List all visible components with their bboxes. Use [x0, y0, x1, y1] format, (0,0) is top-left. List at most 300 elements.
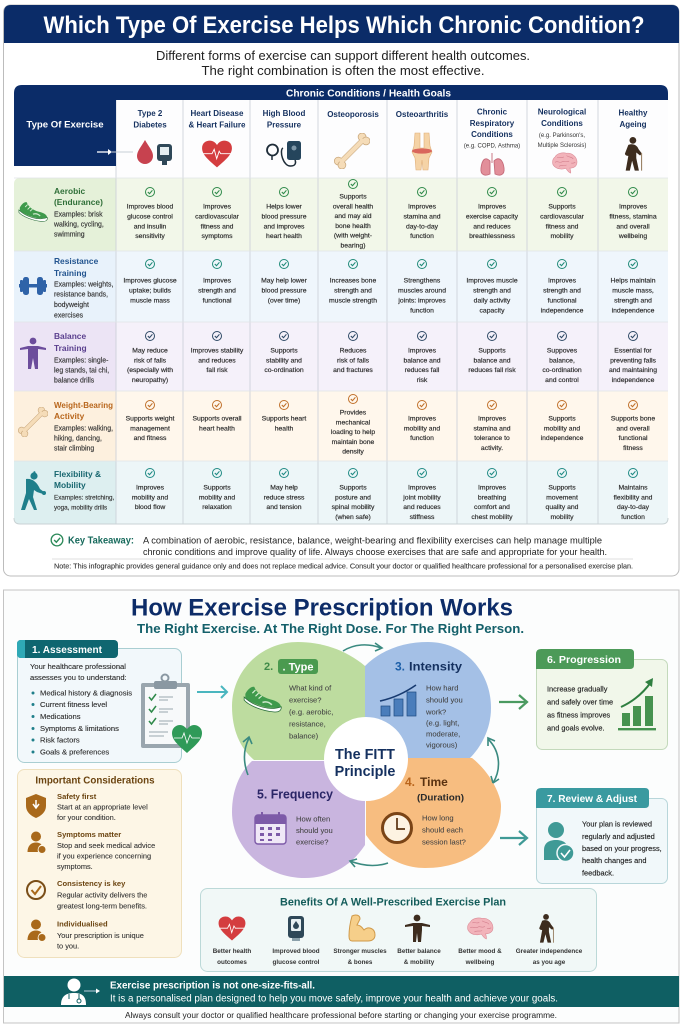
cell: aerobic, blood pressure: Helps lower — [266, 204, 302, 210]
quadrant: time: session last? — [422, 838, 466, 846]
cell: balance, osteoarthritis — [403, 332, 441, 384]
cell: aerobic, blood pressure — [262, 188, 307, 240]
cell: flexibility, osteoporosis: Supports — [339, 484, 367, 492]
cell: balance, osteoarthritis: Improves — [408, 348, 437, 354]
column: osteoporosis: Osteoporosis — [327, 110, 379, 119]
tag: assessment — [17, 640, 118, 658]
item: individualised — [28, 920, 144, 950]
benefit: muscles — [333, 915, 387, 966]
cell: balance, neurological: balance, — [549, 357, 575, 364]
quadrant: intensity: 3. — [395, 660, 405, 674]
cell: resistance, neurological — [541, 260, 584, 314]
cell: resistance, osteoarthritis: joints: improves — [397, 298, 446, 304]
cell: aerobic, respiratory: breathlessness — [469, 233, 515, 240]
quadrant: type: resistance, — [289, 720, 326, 728]
quadrant: type — [232, 642, 365, 760]
item: symptoms matter: Symptoms matter — [57, 830, 121, 839]
list: assessment items: Risk factors — [40, 736, 80, 744]
cell: balance, ageing: Essential for — [614, 348, 652, 354]
tag: progression: 6. Progression — [547, 654, 621, 666]
cell: balance, ageing — [609, 332, 657, 384]
benefit: balance: & mobility — [404, 959, 435, 966]
title: How Exercise Prescription Works — [131, 594, 513, 622]
cell: weight-bearing, heart: heart health — [199, 425, 235, 432]
cell: aerobic, osteoporosis: overall health — [333, 203, 373, 210]
cell: flexibility, osteoporosis: spinal mobility — [332, 504, 375, 511]
key takeaway: chronic conditions and improve quality of life. Always choose exercises that are safe and appropriate for your health. — [143, 547, 607, 557]
cell: flexibility, blood pressure — [264, 468, 305, 511]
cell: balance, osteoarthritis: risk — [417, 377, 428, 384]
column: healthy ageing: Healthy — [619, 108, 648, 118]
benefit: blood glucose: Improved blood — [272, 948, 320, 955]
cell: resistance, neurological: functional — [547, 298, 577, 304]
row label: aerobic: Examples: brisk — [54, 212, 103, 218]
cell: resistance, blood pressure: (over time) — [268, 298, 300, 304]
cell: aerobic, heart: symptoms — [202, 233, 233, 240]
cell: aerobic, heart: Improves — [203, 204, 232, 210]
cell: aerobic, heart — [195, 188, 240, 240]
cell: balance, blood pressure: co-ordination — [264, 367, 304, 374]
row label: aerobic: Aerobic — [54, 186, 86, 196]
row label: flexibility: Mobility — [54, 480, 86, 490]
row label: aerobic: swimming — [54, 232, 85, 238]
cell: aerobic, osteoporosis: bearing) — [341, 242, 365, 250]
row label: weight-bearing: stair climbing — [54, 446, 94, 452]
cell: flexibility, ageing: Maintains — [618, 484, 648, 492]
cell: aerobic, neurological — [540, 188, 585, 240]
text: intro: assesses you to understand: — [30, 673, 127, 682]
row label: aerobic: (Endurance) — [54, 197, 103, 207]
cell: flexibility, osteoporosis — [332, 468, 375, 521]
cell: weight-bearing, respiratory: activity. — [481, 445, 503, 452]
cell: balance, osteoporosis — [333, 332, 373, 374]
cell: resistance, respiratory: strength and — [473, 288, 511, 294]
row label: resistance: resistance bands, — [54, 292, 108, 298]
row label: resistance: Resistance — [54, 256, 99, 266]
cell: balance, heart — [191, 332, 244, 374]
cell: weight-bearing, type 2 diabetes: Supports weight — [126, 416, 174, 422]
cell: aerobic, ageing: wellbeing — [618, 233, 647, 240]
cell: flexibility, respiratory: comfort and — [474, 504, 510, 511]
item: individualised: to you. — [57, 942, 79, 950]
cell: balance, blood pressure: stability and — [266, 357, 302, 364]
cell: resistance, ageing: muscle mass, — [612, 288, 654, 294]
cell: flexibility, heart: mobility and — [199, 494, 235, 501]
cell: resistance, osteoporosis: strength and — [334, 288, 372, 294]
footer note: Always consult your doctor or qualified healthcare professional before starting or changing your exercise programme. — [125, 1011, 557, 1020]
table header band: Chronic Conditions / Health Goals — [286, 88, 451, 100]
cell: resistance, type 2 diabetes: uptake; builds — [129, 288, 172, 294]
cell: aerobic, respiratory — [466, 188, 519, 240]
cell: balance, blood pressure — [264, 332, 304, 374]
banner: not one-size-fits-all — [4, 976, 679, 1007]
cell: resistance, osteoarthritis — [397, 260, 446, 314]
cell: weight-bearing, osteoarthritis: mobility and — [404, 425, 440, 432]
column: neurological conditions: Conditions — [541, 119, 583, 128]
benefit: independence — [516, 914, 583, 966]
row label: balance: Balance — [54, 331, 86, 341]
arrow: FITT to progression — [499, 695, 527, 709]
cell: resistance, neurological: strength and — [543, 288, 581, 294]
cell: weight-bearing, ageing: functional — [618, 435, 648, 442]
cell: resistance, type 2 diabetes: Improves glucose — [123, 278, 177, 284]
cell: flexibility, heart: Supports — [203, 484, 231, 492]
cell: resistance, blood pressure: May help lower — [261, 278, 308, 284]
chart: FITT principle wheel — [232, 642, 501, 878]
icon: person with check — [544, 822, 574, 862]
row label: weight-bearing: hiking, dancing, — [54, 436, 102, 442]
row label: flexibility: Examples: stretching, — [54, 494, 114, 502]
cell: balance, respiratory: reduces fall risk — [468, 367, 516, 374]
cell: flexibility, blood pressure: reduce stress — [264, 494, 305, 501]
column: type 2 diabetes: Diabetes — [133, 120, 167, 130]
table background and grid — [14, 100, 668, 524]
cell: aerobic, osteoarthritis: Improves — [408, 204, 437, 210]
cell: flexibility, respiratory — [471, 468, 513, 521]
cell: weight-bearing, ageing — [611, 400, 655, 452]
benefit: mood: wellbeing — [465, 959, 494, 966]
cell: weight-bearing, blood pressure: health — [275, 425, 293, 432]
cell: balance, neurological — [542, 332, 582, 384]
row label: resistance: Training — [54, 268, 87, 278]
key takeaway: A combination of aerobic, resistance, balance, weight-bearing and flexibility exercises can help manage multiple — [143, 536, 602, 546]
cell: flexibility, heart: relaxation — [202, 504, 232, 511]
quadrant: time: should each — [422, 826, 463, 834]
quadrant: frequency: exercise? — [296, 838, 328, 846]
cell: aerobic, heart: cardiovascular — [195, 213, 240, 220]
cell: weight-bearing, neurological: independence — [541, 435, 584, 442]
cell: aerobic, heart: fitness and — [201, 223, 234, 230]
cell: flexibility, osteoarthritis: and reduces — [403, 504, 441, 511]
cell: aerobic, osteoporosis: and may aid — [334, 213, 372, 220]
cell: aerobic, blood pressure: heart health — [266, 233, 302, 240]
text: intro: Your healthcare professional — [30, 662, 126, 671]
text: progression: and safely over time — [547, 698, 613, 706]
cell: balance, heart: fall risk — [206, 367, 228, 374]
item: safety first — [26, 792, 148, 822]
cell: resistance, neurological: independence — [541, 308, 584, 314]
benefit: blood glucose — [272, 916, 320, 966]
cell: weight-bearing, type 2 diabetes: and fitness — [134, 435, 167, 442]
row label: balance: Examples: single- — [54, 358, 108, 364]
cell: flexibility, osteoarthritis: joint mobility — [402, 494, 441, 501]
quadrant: time: Time — [420, 775, 448, 789]
panel: assessment — [17, 640, 202, 762]
key takeaway: Key Takeaway: — [68, 536, 134, 546]
cell: weight-bearing, heart: Supports overall — [192, 416, 242, 422]
row label: resistance: Examples: weights, — [54, 282, 113, 288]
text: review: health changes and — [582, 856, 647, 865]
column: high blood pressure: Pressure — [267, 120, 302, 130]
panel: progression — [536, 649, 668, 750]
row label: weight-bearing: Activity — [54, 411, 85, 421]
cell: balance, heart: Improves stability — [191, 348, 244, 354]
cell: aerobic, neurological: Supports — [548, 204, 576, 210]
subtitle: Different forms of exercise can support different health outcomes. — [156, 49, 530, 63]
cell: flexibility, respiratory: Improves — [478, 484, 507, 492]
panel: benefits — [200, 888, 596, 972]
cell: weight-bearing, heart — [192, 400, 242, 432]
cell: balance, neurological: and control — [545, 377, 579, 384]
list: assessment items: Goals & preferences — [40, 748, 109, 756]
column: high blood pressure — [263, 109, 305, 166]
cell: balance, type 2 diabetes: risk of falls — [134, 357, 167, 364]
subtitle: The right combination is often the most effective. — [202, 64, 484, 78]
cell: weight-bearing, neurological — [541, 400, 584, 442]
cell: aerobic, osteoporosis: bone health — [335, 223, 371, 230]
cell: flexibility, neurological: movement — [546, 494, 578, 501]
quadrant: intensity: (e.g. light, — [426, 718, 459, 728]
cell: resistance, respiratory: daily activity — [474, 298, 511, 304]
row cells: balance — [127, 332, 657, 384]
cell: balance, type 2 diabetes: (especially with — [127, 367, 173, 374]
list: assessment items: Medications — [40, 712, 81, 721]
text: banner: It is a personalised plan designed to help you move safely, improve your health and achieve your goals. — [110, 994, 558, 1004]
cell: flexibility, neurological: Supports — [548, 484, 576, 492]
quadrant: intensity: Intensity — [409, 660, 462, 674]
cell: resistance, type 2 diabetes — [123, 260, 177, 304]
note: Note: This infographic provides general guidance only and does not replace medical advice. Consult your doctor or qualified healthcare professional for a personalised exercise plan. — [54, 564, 633, 570]
cell: aerobic, osteoarthritis: day-to-day — [406, 223, 439, 230]
cell: flexibility, blood pressure: May help — [270, 484, 298, 492]
cell: flexibility, ageing: function — [621, 514, 645, 521]
cell: aerobic, osteoarthritis: stamina and — [403, 213, 441, 220]
cell: flexibility, blood pressure: and tension — [266, 504, 302, 511]
quadrant: frequency — [232, 761, 365, 878]
column: high blood pressure: High Blood — [263, 109, 305, 118]
column: type 2 diabetes — [133, 109, 172, 165]
cell: flexibility, type 2 diabetes: mobility and — [132, 494, 168, 501]
quadrant: type: balance) — [289, 732, 319, 740]
cell: weight-bearing, ageing: Supports bone — [611, 416, 655, 422]
cell: weight-bearing, blood pressure — [262, 400, 306, 432]
row label: balance: leg stands, tai chi, — [54, 368, 109, 374]
cell: flexibility, neurological: quality and — [546, 504, 579, 511]
quadrant: frequency: How often — [296, 814, 330, 824]
cell: weight-bearing, osteoporosis: Provides — [340, 410, 367, 416]
row cells: resistance — [123, 260, 656, 314]
item: symptoms matter: Stop and seek medical advice — [57, 841, 155, 850]
cell: weight-bearing, respiratory: Improves — [478, 416, 507, 422]
cell: balance, neurological: co-ordination — [542, 367, 582, 374]
column: heart disease: Heart Disease — [191, 109, 244, 118]
item: symptoms matter: if you experience concerning — [57, 852, 151, 860]
column: chronic respiratory conditions: Chronic — [477, 108, 508, 116]
panel: review and adjust — [536, 788, 668, 884]
text: progression: Increase gradually — [547, 684, 608, 694]
column: chronic respiratory conditions — [464, 108, 520, 175]
cell: aerobic, ageing: and overall — [616, 223, 650, 230]
arrow: assessment to FITT — [197, 686, 227, 698]
cell: flexibility, ageing: flexibility and — [614, 494, 653, 501]
cell: aerobic, osteoarthritis: function — [410, 233, 434, 240]
panel: how exercise prescription works — [4, 590, 679, 1023]
cell: weight-bearing, ageing: and overall — [616, 425, 650, 432]
quadrant: intensity: should you — [426, 696, 463, 704]
item: consistency: greatest long-term benefits. — [57, 902, 147, 910]
column: chronic respiratory conditions: Conditions — [471, 130, 513, 139]
cell: weight-bearing, osteoporosis: mechanical — [336, 419, 371, 426]
icon: doctor — [61, 978, 100, 1005]
arrow: FITT to review — [500, 831, 527, 845]
quadrant: type: 2. — [264, 661, 273, 673]
row label: flexibility — [21, 469, 114, 512]
cell: weight-bearing, osteoporosis: loading to help — [331, 429, 375, 436]
benefit: independence: as you age — [533, 959, 566, 966]
benefit: blood glucose: glucose control — [273, 959, 320, 966]
cell: weight-bearing, osteoarthritis: Improves — [408, 416, 437, 422]
text: banner — [110, 980, 558, 1004]
cell: aerobic, neurological: cardiovascular — [540, 213, 585, 220]
cell: flexibility, heart — [199, 468, 235, 511]
row label: aerobic: walking, cycling, — [53, 222, 104, 228]
cell: resistance, ageing: strength and — [614, 298, 652, 304]
quadrant: time: How long — [422, 814, 454, 822]
panel: exercise and chronic conditions matrix — [4, 5, 679, 576]
quadrant: time: 4. — [405, 775, 415, 789]
item: individualised: Individualised — [57, 920, 108, 928]
item: consistency: Consistency is key — [57, 879, 126, 888]
row label: balance — [20, 331, 109, 384]
cell: aerobic, type 2 diabetes: and insulin — [134, 223, 166, 230]
cell: resistance, type 2 diabetes: muscle mass — [130, 298, 170, 304]
item: symptoms matter: symptoms. — [57, 862, 93, 871]
row label: balance: Training — [54, 343, 87, 353]
row label: weight-bearing: Weight-Bearing — [54, 400, 113, 410]
cell: balance, ageing: preventing falls — [610, 357, 656, 364]
cell: flexibility, type 2 diabetes — [132, 468, 168, 511]
cell: weight-bearing, neurological: mobility and — [544, 425, 580, 432]
quadrant: intensity — [365, 642, 491, 758]
cell: weight-bearing, respiratory: tolerance to — [474, 435, 510, 442]
quadrant: frequency: should you — [296, 826, 333, 835]
row label: weight-bearing: Examples: walking, — [54, 426, 113, 432]
benefit: mood: Better mood & — [458, 948, 502, 955]
benefit: mood — [458, 918, 502, 966]
cell: balance, osteoporosis: and fractures — [333, 367, 373, 374]
column: neurological conditions: Multiple Sclerosis) — [538, 143, 586, 149]
item: safety first: for your condition. — [57, 813, 116, 822]
cell: weight-bearing, osteoporosis: maintain bone — [332, 439, 375, 446]
quadrant: time: (Duration) — [417, 792, 464, 802]
cell: resistance, ageing — [611, 260, 656, 314]
cell: flexibility, ageing: day-to-day — [617, 504, 650, 511]
quadrant: intensity: work? — [425, 708, 446, 716]
cell: resistance, osteoporosis: Increases bone — [330, 278, 376, 284]
cell: aerobic, type 2 diabetes: Improves blood — [127, 204, 173, 210]
item: symptoms matter — [28, 830, 155, 871]
cell: resistance, neurological: Improves — [548, 278, 577, 284]
quadrant: frequency: 5. Frequency — [257, 788, 333, 802]
cell: flexibility, osteoporosis: posture and — [335, 494, 371, 501]
arrow: header to columns — [97, 149, 133, 155]
cell: aerobic, type 2 diabetes — [127, 188, 173, 240]
benefit: muscles: & bones — [348, 959, 373, 966]
cell: flexibility, respiratory: chest mobility — [471, 514, 513, 521]
heading: Benefits Of A Well-Prescribed Exercise Plan — [280, 896, 506, 908]
text: progression: and goals evolve. — [547, 724, 605, 732]
cell: resistance, respiratory: capacity — [480, 308, 505, 314]
cell: balance, heart: and reduces — [198, 357, 236, 364]
cell: balance, osteoporosis: Reduces — [340, 348, 367, 354]
subtitle: The Right Exercise. At The Right Dose. For The Right Person. — [137, 621, 524, 636]
cell: aerobic, blood pressure: blood pressure — [262, 213, 307, 220]
cell: aerobic, osteoporosis: (with weight- — [334, 233, 372, 240]
heading: Important Considerations — [35, 776, 155, 786]
cell: balance, ageing: and maintaining — [609, 367, 657, 374]
cell: resistance, heart: strength and — [198, 288, 236, 294]
quadrant: type: exercise? — [289, 696, 322, 704]
cell: aerobic, type 2 diabetes: sensitivity — [135, 233, 165, 240]
column: osteoporosis — [327, 110, 379, 169]
cell: balance, type 2 diabetes: May reduce — [132, 348, 168, 354]
benefit: better health: Better health — [213, 948, 251, 955]
cell: aerobic, respiratory: Improves — [478, 204, 507, 210]
column: chronic respiratory conditions: Respiratory — [470, 119, 515, 128]
text: review: Your plan is reviewed — [582, 820, 652, 828]
item: safety first: Safety first — [57, 792, 97, 801]
cell: aerobic, neurological: mobility — [550, 233, 574, 240]
cell: balance, osteoarthritis: balance and — [403, 357, 441, 364]
benefit: better health: outcomes — [217, 959, 247, 966]
subtitle — [156, 49, 530, 78]
quadrant: type: What kind of — [289, 684, 332, 692]
cell: resistance, heart — [198, 260, 236, 304]
item: individualised: Your prescription is unique — [57, 931, 144, 940]
tag: review and adjust: 7. Review & Adjust — [547, 793, 637, 805]
benefit: independence: Greater independence — [516, 948, 583, 955]
cell: weight-bearing, type 2 diabetes — [126, 400, 174, 442]
cell: weight-bearing, type 2 diabetes: management — [130, 425, 170, 432]
column: chronic respiratory conditions: (e.g. COPD, Asthma) — [464, 144, 520, 150]
cell: flexibility, ageing — [614, 468, 653, 521]
cell: balance, osteoarthritis: reduces fall — [405, 367, 440, 374]
benefit: muscles: Stronger muscles — [333, 948, 387, 955]
column: healthy ageing — [619, 108, 648, 171]
cell: resistance, ageing: Helps maintain — [611, 278, 656, 284]
row cells: aerobic — [127, 180, 657, 250]
cell: resistance, respiratory — [466, 260, 518, 314]
cell: flexibility, osteoarthritis: Improves — [408, 484, 437, 492]
row label: weight-bearing — [18, 400, 113, 452]
text: progression: as fitness improves — [547, 710, 611, 720]
cell: weight-bearing, osteoarthritis — [404, 400, 440, 442]
cell: weight-bearing, respiratory: stamina and — [473, 425, 511, 432]
panel: important considerations — [18, 770, 182, 958]
cell: resistance, osteoporosis — [329, 260, 377, 304]
list: assessment items — [32, 688, 132, 756]
text: review: regularly and adjusted — [582, 832, 655, 841]
cell: resistance, osteoarthritis: function — [410, 308, 434, 314]
cell: aerobic, respiratory: and reduces — [473, 223, 511, 230]
cell: flexibility, neurological: mobility — [550, 514, 574, 521]
icon: clipboard with heart — [141, 674, 202, 753]
tag: assessment: 1. Assessment — [32, 645, 103, 656]
cell: weight-bearing, neurological: Supports — [548, 416, 576, 422]
cell: balance, respiratory: Supports — [478, 348, 506, 354]
cell: balance, ageing: independence — [612, 377, 655, 384]
cell: flexibility, type 2 diabetes: Improves — [136, 484, 165, 492]
benefit: better health — [213, 916, 251, 966]
row label: flexibility: Flexibility & — [54, 469, 101, 479]
column: heart disease — [189, 109, 246, 167]
cell: balance, osteoporosis: risk of falls — [337, 357, 370, 364]
cell: balance, type 2 diabetes — [127, 332, 173, 384]
cell: aerobic, osteoporosis — [333, 180, 373, 250]
centre circle: the FITT principle: The FITT — [335, 747, 395, 763]
row label: flexibility: yoga, mobility drills — [54, 504, 107, 512]
cell: flexibility, osteoarthritis — [402, 468, 441, 521]
